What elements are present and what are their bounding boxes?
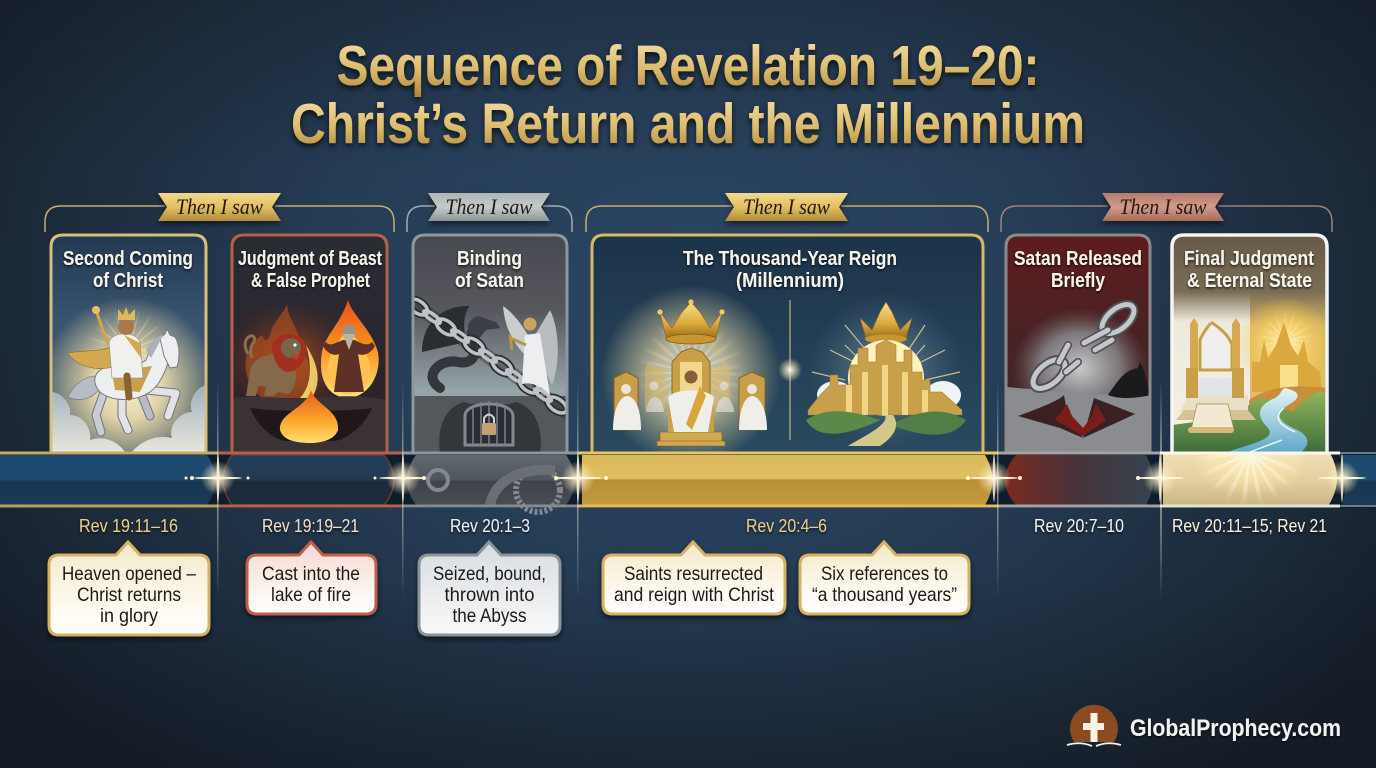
icon: false prophet in fire (321, 300, 379, 398)
callout: six references (800, 542, 969, 614)
icon: shadow figure (1108, 362, 1150, 398)
icon: clouds (51, 385, 206, 452)
bracket group 2: Then I saw (407, 193, 572, 232)
card title (238, 248, 382, 292)
icon: beast lion (245, 334, 306, 396)
title: Christ’s Return and the Millennium (291, 92, 1085, 156)
card title: Briefly (1051, 270, 1106, 292)
callout: lake of fire: lake of fire (271, 584, 351, 606)
segment 5 (1005, 455, 1153, 505)
bracket group 4: Then I saw: Then I saw (1120, 194, 1207, 219)
segment 4: gold (582, 455, 992, 505)
icon: flames behind beast (246, 304, 318, 398)
icon: abyss gate (439, 401, 541, 452)
card: Binding of Satan (406, 235, 575, 453)
icon: dragon (422, 306, 500, 388)
callout: lake of fire (247, 542, 376, 614)
icon: rays (1260, 314, 1310, 354)
icon: green land and river (1172, 388, 1327, 453)
segment 2 (223, 455, 394, 505)
card title: Final Judgment (1184, 248, 1314, 270)
card title (1184, 248, 1314, 292)
icon: sunburst rays (644, 334, 737, 412)
card: Satan Released Briefly (1006, 235, 1150, 453)
segment 1 (0, 455, 216, 505)
bracket group 2: Then I saw: Then I saw (446, 194, 533, 219)
bracket group 4: Then I saw (1001, 193, 1332, 232)
card title: Judgment of Beast (238, 248, 382, 270)
timeline dots (184, 476, 1140, 480)
scripture references: Rev 20:7–10 (1034, 516, 1124, 536)
callout: Heaven opened: Christ returns (77, 584, 181, 606)
segment 6: light burst (1163, 454, 1337, 504)
callout: lake of fire: Cast into the (262, 563, 360, 585)
card: Final Judgment and Eternal State (1172, 235, 1333, 453)
icon: saints on side thrones (613, 362, 767, 430)
bracket group 3: Then I saw (586, 193, 988, 232)
bracket group 1: Then I saw (45, 193, 394, 232)
card title: The Thousand-Year Reign (683, 248, 897, 270)
card title (455, 248, 524, 292)
card title (1014, 248, 1142, 292)
icon: golden crown left (657, 299, 725, 344)
bracket group 3: Then I saw: Then I saw (743, 194, 830, 219)
scripture references: Rev 19:11–16 (79, 516, 178, 536)
scripture references: Rev 19:19–21 (262, 516, 359, 536)
logo: GlobalProphecy.com (1067, 705, 1341, 746)
icon: golden city (806, 340, 966, 446)
card: Judgment of Beast and False Prophet (220, 235, 387, 453)
title (291, 34, 1085, 156)
callout: Heaven opened: in glory (100, 605, 158, 627)
card title: Second Coming (63, 248, 193, 270)
card title: of Christ (93, 270, 163, 292)
scripture references: Rev 20:11–15; Rev 21 (1172, 516, 1327, 536)
callout: saints resurrected: and reign with Christ (614, 584, 775, 606)
callout: seized, bound: the Abyss (452, 605, 527, 627)
card title (63, 248, 193, 292)
callout: seized, bound: thrown into (444, 584, 535, 606)
icon: cracked ground (1006, 387, 1150, 452)
segment 3: gears (407, 455, 575, 512)
icon: Christ enthroned (657, 348, 725, 446)
icon: crown right (860, 302, 912, 344)
icon: angel with key (503, 306, 558, 395)
card title: & Eternal State (1187, 270, 1312, 292)
scripture references (79, 516, 1327, 536)
icon: sun rays around city (812, 325, 960, 380)
card title: of Satan (455, 270, 524, 292)
callout: six references: Six references to (821, 563, 948, 585)
icon: broken chain (1028, 299, 1139, 394)
icon: cross over sun and book (1067, 705, 1121, 746)
callout: saints resurrected (603, 542, 785, 614)
callout: seized, bound (419, 542, 560, 635)
scripture references: Rev 20:1–3 (450, 516, 530, 536)
callout: seized, bound: Seized, bound, (433, 563, 546, 585)
segment end stub (1340, 455, 1376, 505)
card title: & False Prophet (251, 270, 370, 292)
icon: fire pit (232, 390, 387, 452)
icon: chain (406, 296, 575, 418)
card title: (Millennium) (736, 270, 844, 292)
band rails (0, 453, 1376, 506)
bracket group 1: Then I saw: Then I saw (176, 194, 263, 219)
card title (683, 248, 897, 292)
card title: Binding (457, 248, 522, 270)
icon: white throne (1176, 318, 1256, 433)
icon: sunburst rays (92, 313, 158, 362)
timeline band (0, 452, 1376, 515)
callout: Heaven opened: Heaven opened – (62, 563, 196, 585)
title: Sequence of Revelation 19–20: (336, 34, 1040, 98)
divider beams and flares (194, 380, 1366, 600)
callout: saints resurrected: Saints resurrected (624, 563, 763, 585)
icon: golden city (1249, 322, 1327, 420)
logo: GlobalProphecy.com: GlobalProphecy.com (1130, 715, 1341, 742)
scripture references: Rev 20:4–6 (746, 516, 827, 536)
callout: Heaven opened (49, 542, 209, 635)
callout: six references: “a thousand years” (812, 584, 957, 606)
card: The Thousand-Year Reign (592, 235, 983, 465)
card: Second Coming of Christ (50, 234, 208, 452)
icon: rider on white horse (68, 306, 179, 432)
card title: Satan Released (1014, 248, 1142, 270)
